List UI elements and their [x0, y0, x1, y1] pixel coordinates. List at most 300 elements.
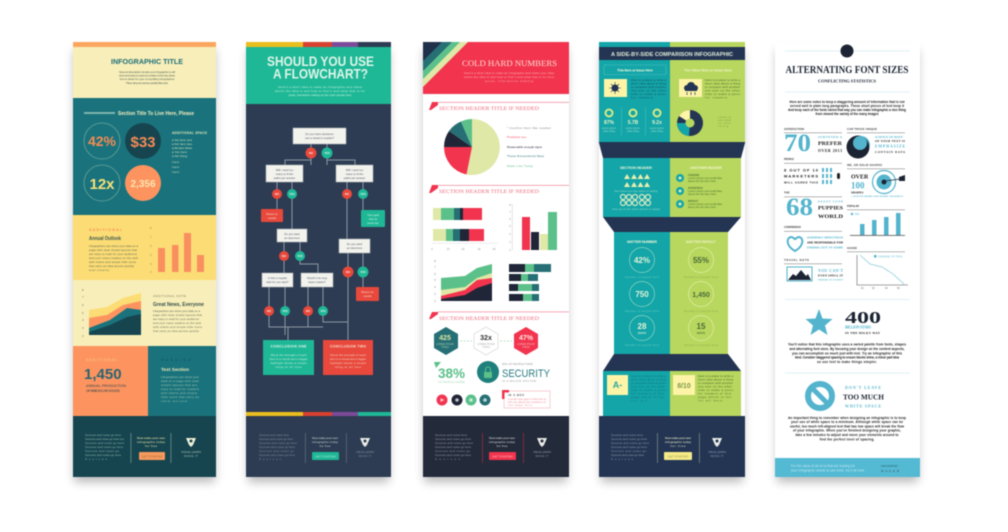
- button: [664, 452, 692, 460]
- column chart: 2: [509, 248, 511, 252]
- stat: 12x: [84, 165, 120, 201]
- additional info list: a list item one: [172, 138, 192, 142]
- footer: your infographic needs to use tools, try it all over.: [791, 468, 865, 472]
- header: [423, 42, 569, 94]
- stat: heart: [784, 225, 844, 251]
- header: COLD HARD NUMBERS: [462, 58, 557, 68]
- body text: You'll notice that this infographic uses a varied palette from fonts, shapes: [788, 342, 906, 346]
- pie legend: * Confirm their like number: [507, 126, 551, 130]
- line chart: gauge: '12: [860, 287, 864, 290]
- three stats: 9.2x: [652, 120, 662, 126]
- footer: Sources and notes here: [611, 433, 643, 437]
- stat: heart: FINDING OUT AT HOME: [807, 246, 843, 250]
- line chart: gauge: GAUGE: [847, 246, 857, 250]
- left grade text: side to make a point: [631, 388, 666, 392]
- text block: annual outlook: Annual Outlook: [89, 236, 121, 242]
- text block: left: Here is a place to write a: [631, 78, 666, 82]
- panel: text section: easy to read by readers: [161, 387, 200, 391]
- additional info list: item: [172, 160, 180, 164]
- title band: A SIDE-BY-SIDE COMPARISON INFOGRAPHIC: [611, 52, 733, 58]
- node labels: NO: [309, 151, 314, 155]
- area chart: 6: [82, 303, 84, 307]
- donut chart: [677, 110, 703, 136]
- footer: MAKER: [881, 469, 900, 473]
- hexagon stat: 47%: 47%: [519, 335, 534, 342]
- panel: text section: data on a page with clear: [161, 379, 199, 383]
- conclusion two: [323, 340, 373, 375]
- node labels: YES: [324, 151, 330, 155]
- three stats: 87%: [604, 120, 615, 126]
- flow box text: [266, 132, 365, 284]
- left captions: Number of people here: [625, 275, 659, 279]
- bar chart: popular: POPULAR: [847, 204, 859, 208]
- subtitle: CONFLICTING STATISTICS: [818, 78, 877, 84]
- column chart: 5: [509, 224, 511, 228]
- stat: 68 puppies: FUZZY CUTE: [818, 200, 843, 204]
- panel: big number: ANNUAL PRODUCTION: [86, 384, 126, 388]
- footer: For the value of all of us that are looking for: [791, 464, 856, 468]
- three stats: Lorem ipsum: [626, 127, 640, 130]
- flow box text: paths per answer: [344, 176, 365, 180]
- left grade text: page which is fun: [631, 395, 664, 399]
- area chart: 8: [82, 288, 84, 292]
- hexagon stat: 32x: [474, 327, 498, 355]
- stat: 8 out of 10: WILL AGREE THIS: [784, 180, 818, 184]
- button: [489, 452, 516, 460]
- donut note: thing: [718, 125, 729, 128]
- list: about the list item here: [688, 179, 717, 183]
- footer: MAKE IT: [358, 454, 372, 458]
- icon: sun: [604, 79, 627, 97]
- section: circle stats: [614, 232, 728, 354]
- dashed link: [460, 340, 512, 342]
- left values: 750: [635, 290, 649, 299]
- node labels: YES: [360, 192, 366, 196]
- callout: too much white space: WHITE SPACE: [845, 404, 881, 408]
- area chart: 8: [434, 259, 436, 263]
- flow box text: paths per answer: [274, 176, 295, 180]
- conclusion one: [263, 340, 314, 375]
- stat: pac chart: [846, 127, 906, 158]
- line chart: gauge: [847, 246, 908, 290]
- right grade text: page which is fun: [698, 395, 731, 399]
- node labels: YES: [289, 192, 295, 196]
- intro text: Here are some notes to keep a staggering amount of information that is not: [790, 100, 905, 104]
- stat: 400: 400: [845, 308, 881, 327]
- header dot and rule: [785, 44, 910, 58]
- column chart: 8: [509, 203, 511, 207]
- stat: 70: SURVEYED A: [818, 135, 843, 139]
- section: two lists: SECTION HEADER: [620, 166, 652, 170]
- text block: right: short idea about a thing: [705, 82, 740, 86]
- bar chart: 7: [150, 235, 152, 239]
- right values: 55%: [693, 256, 709, 265]
- section header 2: [429, 185, 569, 195]
- panel: text section: Text Section: [161, 367, 189, 372]
- footer: VISUAL LEARN: [181, 450, 201, 454]
- panel: text section: with charts and simple: [161, 391, 197, 395]
- text block: right: one over on the other: [705, 88, 740, 92]
- stat: over 100 shapes: [847, 163, 905, 198]
- additional info list: item: [172, 165, 180, 169]
- title band: [599, 47, 745, 60]
- right values: [692, 256, 710, 335]
- list: about the list item here: [688, 192, 717, 196]
- footer: Sources and notes go: [435, 449, 470, 453]
- footer: for free: [496, 444, 508, 448]
- footer: for free: [320, 444, 331, 448]
- stat: 8 out of 10: 8 OUT OF 10: [784, 168, 819, 172]
- text block: great news: with charts and simple little icons: [153, 325, 202, 329]
- line chart: gauge: '13: [871, 287, 875, 290]
- text block: great news: Great News, Everyone: [153, 302, 204, 308]
- text block: great news: are easy to read for your audience: [153, 317, 199, 321]
- left values: [634, 256, 650, 335]
- area chart: [434, 259, 492, 303]
- stat: 70: OVER 2013: [818, 149, 842, 153]
- node labels: NO: [345, 192, 350, 196]
- section header 1: SECTION HEADER TITLE IF NEEDED: [439, 107, 539, 112]
- header: which the idea is and how to find it and what that is for here: [464, 75, 554, 79]
- section title: [84, 111, 194, 117]
- section: two lists: One out of the other person in space: [612, 207, 661, 211]
- area chart: 3: [434, 292, 436, 296]
- footer: for free: [670, 444, 686, 448]
- stat: mountain: [784, 258, 844, 282]
- stat: mountain: YOU CAN'T: [818, 268, 843, 273]
- right grade text: for readers of this: [698, 392, 732, 396]
- text block: left: side to make a point: [631, 92, 666, 96]
- outcome boxes: Return to: [266, 212, 278, 216]
- text block: annual outlook: Infographics can show your data on a: [89, 244, 138, 248]
- footer: MAKE IT: [710, 454, 724, 458]
- additional info list: item: [172, 170, 180, 174]
- text block: annual outlook: ADDITIONAL: [89, 228, 123, 232]
- icon row: rings: [620, 194, 650, 206]
- right circles: [688, 248, 714, 340]
- pie legend: Those Encountered Days: [507, 154, 544, 158]
- footer: MAKE IT: [536, 454, 549, 458]
- left grade text: short idea about a thing: [631, 378, 666, 382]
- icon row: people: [624, 174, 650, 187]
- grade 8/10: 8/10: [677, 383, 691, 390]
- additional info list: a list item two: [172, 142, 192, 146]
- body text: so use text to make things simpler.: [817, 360, 877, 364]
- no nodes: [264, 148, 354, 316]
- additional info list: a list thing: [172, 154, 187, 158]
- stat: 38%: 38%: [438, 365, 466, 381]
- donut note: [718, 116, 732, 128]
- area chart: 7: [434, 265, 436, 269]
- list: STATISTICS: [688, 186, 703, 190]
- outcome boxes: some fun: [367, 221, 379, 225]
- area chart: 2: [434, 299, 436, 303]
- list: about the list item here: [688, 205, 717, 209]
- conclusion one: CONCLUSION ONE: [270, 344, 307, 348]
- footer: Sources and notes go here: [85, 445, 123, 449]
- footer: Sources and notes go here: [259, 453, 295, 457]
- hexagon stat: 32x: 32x: [480, 335, 492, 342]
- right grade text: [698, 374, 733, 402]
- stat: 2,356: [125, 165, 161, 201]
- stacked bars: 0: [431, 247, 433, 251]
- stat: pac chart: EMPHASIZE: [875, 144, 905, 148]
- button: GET STARTED: [668, 454, 689, 458]
- right captions: Number of people here: [684, 309, 718, 313]
- stat: 68 puppies: [784, 190, 843, 221]
- panel: cold hard numbers: [423, 42, 569, 477]
- footer: Sources and notes here: [435, 433, 467, 437]
- footer: Sources and notes go here: [85, 441, 124, 445]
- node labels: YES: [297, 254, 303, 258]
- flow box text: Is this a regular: [268, 276, 287, 280]
- hexagon stat: 47%: LOREM IPSUM: [517, 343, 535, 346]
- three stats: dolor thing: [627, 130, 639, 133]
- intro text: served well in plain long paragraphs. These short pieces of text keep it: [790, 104, 905, 108]
- callout: too much white space: [843, 385, 885, 408]
- outcome boxes: Your goal: [367, 213, 379, 217]
- additional info list: a list item: [172, 150, 188, 154]
- right values: DAYS: [697, 331, 705, 335]
- callout: too much white space: DON'T LEAVE: [845, 385, 881, 390]
- text block: left: for readers: [631, 96, 654, 100]
- right heading: The Other Item or Issue Here: [684, 68, 732, 72]
- flow box text: steps maybe?: [308, 280, 326, 284]
- navy fold 3: [603, 354, 741, 371]
- stacked bars: [431, 208, 498, 251]
- flow box text: many to fit the: [346, 172, 364, 176]
- security stat: IS A MAJOR FACTOR: [502, 379, 536, 383]
- security stat: SECURITY: [502, 368, 551, 380]
- pie legend: Made Like Today: [507, 164, 534, 168]
- footer: infographic today: [137, 440, 165, 444]
- body text: of your infographic. When you've finished designing your graphic,: [793, 428, 901, 432]
- stat: heart: SUDDENLY INFECTIOUS: [807, 236, 843, 240]
- text block: left: one over on the other: [631, 88, 666, 92]
- line chart: gauge: CHANGE TO THIS: [878, 256, 902, 258]
- text block: left: [631, 78, 666, 100]
- panel shadows: [74, 50, 918, 482]
- additional info list: ADDITIONAL SPACE: [172, 131, 207, 135]
- stat: 38%: OF PEOPLE AGREE: [438, 380, 465, 384]
- panel: text section: HEADING: [161, 358, 191, 362]
- bar chart: popular: [847, 204, 905, 236]
- stat: 8 out of 10: [784, 157, 842, 184]
- right grade text: one over on the other: [698, 384, 732, 388]
- column chart: 7: [509, 210, 511, 214]
- left captions: Number of people here: [625, 343, 659, 347]
- stat: pac chart: SCIENCE OF MANY: [875, 135, 904, 139]
- bar chart: 6: [150, 244, 152, 248]
- left captions: [625, 275, 659, 347]
- footer: infographic today: [665, 440, 691, 444]
- conclusion one: item is a visual and a bigger: [270, 357, 308, 361]
- outcome boxes: [261, 209, 385, 301]
- area chart: 4: [434, 285, 436, 289]
- panel: text section: [148, 346, 216, 416]
- footer: Sources: [259, 457, 282, 461]
- line chart: gauge: '15: [896, 287, 900, 290]
- flow box text: Will i need too: [346, 168, 364, 172]
- footer: Sources: [611, 457, 634, 461]
- text block: annual outlook: and your many readers on the web: [89, 256, 138, 260]
- text block: left: short idea about a thing: [631, 82, 666, 86]
- footer: infographic today: [312, 440, 338, 444]
- panel: big number: ADDITIONAL: [86, 358, 117, 362]
- hexagon stat: 425: THING: [441, 346, 449, 349]
- navy fold 1: [599, 142, 745, 158]
- body text: your use of white space to a minimum. Although white space can be: [791, 420, 903, 424]
- footer: Sources and notes go here: [85, 453, 121, 457]
- body text: [788, 416, 906, 442]
- node labels: YES: [320, 309, 326, 313]
- footer: Sources and notes go here: [435, 453, 471, 457]
- node labels: NO: [275, 192, 280, 196]
- area chart: [82, 288, 141, 338]
- text block: right: for readers: [705, 96, 728, 100]
- node labels: NO: [306, 309, 311, 313]
- flow box text: an idea here: [284, 236, 300, 240]
- text block: right: to compare with another: [705, 85, 740, 89]
- footer: Sources: [85, 457, 108, 461]
- flow box text: Do you want: [284, 232, 300, 236]
- bar chart: [150, 226, 204, 274]
- section header 3: SECTION HEADER TITLE IF NEEDED: [439, 317, 539, 322]
- corner stripes: [423, 42, 468, 87]
- footer: Sources and notes go: [85, 449, 119, 453]
- header: quick, interactive making: [485, 79, 533, 83]
- footer: MAKE IT: [184, 454, 198, 458]
- section header 2: SECTION HEADER TITLE IF NEEDED: [439, 190, 539, 195]
- donut note: Lorem ip: [718, 116, 732, 119]
- three stats: Lorem ipsum: [650, 127, 664, 130]
- stat: 68 puppies: 68: [786, 194, 813, 221]
- node labels: NO: [346, 270, 351, 274]
- section: two lists: ANOTHER HEADER: [690, 166, 722, 170]
- footer: Sources and notes go here: [611, 437, 647, 441]
- button: [139, 452, 165, 460]
- conclusion two: CONCLUSION TWO: [330, 344, 366, 348]
- text block: great news: ADDITIONAL NOTE: [153, 294, 186, 298]
- footer: Sources and notes go here: [435, 437, 471, 441]
- left grade text: Here is a place to write a: [631, 374, 666, 378]
- heading: infographic title: INFOGRAPHIC TITLE: [111, 59, 183, 66]
- pie legend: Products too: [507, 135, 526, 139]
- callout: too much white space: TOO MUCH: [843, 394, 885, 402]
- right grade text: to compare with another: [698, 381, 733, 385]
- footer: INFOGRAPHIC: [881, 464, 899, 468]
- stat: 400: BILLION STARS: [845, 326, 871, 330]
- text block: great news: and your many readers on the web: [153, 321, 201, 325]
- right captions: [684, 275, 718, 347]
- stat: over 100 shapes: WE, OR SOLID SHAPES: [847, 163, 882, 167]
- intro text: from viewed the variety of the many images: [816, 112, 879, 116]
- horizontal stacked bars: [509, 264, 551, 301]
- footer: VISUAL LEARN: [356, 450, 374, 454]
- left heading: This Item or Issue Here: [617, 68, 653, 72]
- stat: 70: 70: [784, 130, 811, 157]
- stat: over 100 shapes: SHAPES: [851, 190, 864, 194]
- footer: Now make your own: [489, 436, 515, 440]
- panel: big number: 1,450: [84, 366, 122, 383]
- panel: big number: OF BRICKS OR GOODS: [86, 389, 121, 393]
- panel: side by side comparison: [599, 42, 745, 477]
- right grade text: side to make a point: [698, 388, 733, 392]
- list: [676, 173, 723, 209]
- footer: [775, 458, 920, 477]
- intro text: And keep each of the fonts varied that way you can make infographic a nice thing: [788, 108, 906, 112]
- section header 3: [429, 312, 569, 322]
- icon: logo: [360, 438, 370, 447]
- bar chart: popular: 5%: [855, 212, 860, 216]
- callout: a small note goes in this box to: [508, 398, 547, 401]
- stat: 70: [784, 127, 843, 157]
- list: Lorem ipsum one small idea: [688, 176, 723, 180]
- panel: big number: [73, 346, 148, 416]
- conclusion one: About the strength of each: [270, 353, 307, 357]
- pie legend: Reasonable enough signs: [507, 145, 542, 149]
- left values: DAYS: [638, 331, 646, 335]
- donut note: sum dolor: [718, 119, 731, 122]
- icon: star: [806, 309, 832, 335]
- panel: text section: idea across: [161, 399, 188, 403]
- outcome boxes: Ask for: [369, 217, 377, 221]
- color band: [246, 412, 391, 416]
- pie legend: [507, 126, 551, 168]
- security stat: 90% OF PEOPLE THINK: [502, 362, 533, 366]
- footer: Sources and notes go here: [611, 441, 649, 445]
- text block: annual outlook: are easy to read for your audience: [89, 252, 137, 256]
- text block: annual outlook: and clearly: [89, 268, 110, 272]
- bar chart: 5: [150, 253, 152, 257]
- column chart: 6: [509, 217, 511, 221]
- icon: logo: [537, 438, 547, 447]
- icon row: [436, 394, 490, 406]
- panel: flowchart: [246, 42, 391, 477]
- icon: logo: [186, 438, 196, 447]
- footer: Sources and notes go here: [435, 445, 471, 449]
- footer: [73, 416, 216, 477]
- text block: great news: Infographics can show your data on a: [153, 309, 200, 313]
- yes nodes: [280, 148, 368, 316]
- text block: great news: page with clear simple layouts that: [153, 313, 202, 317]
- header: which the idea is and how to find it and what that is for: [275, 89, 365, 93]
- right grade text: short idea about a thing: [698, 378, 733, 382]
- bar chart: 8: [150, 226, 152, 230]
- flow box text: Will i need too: [276, 168, 294, 172]
- stripe: [246, 42, 358, 47]
- outcome boxes: results: [268, 216, 277, 220]
- text block: intro: [119, 70, 176, 85]
- stat: pac chart: CONTAIN DATA: [875, 150, 906, 154]
- flow box text: Do you want: [347, 242, 362, 246]
- stat: 12x: 12x: [89, 176, 115, 193]
- area chart: 6: [434, 272, 436, 276]
- list: RESULT: [688, 199, 699, 203]
- footer: Now make your own: [312, 436, 338, 440]
- outcome boxes: Return for: [361, 290, 374, 294]
- button: GET STARTED: [315, 454, 337, 458]
- stacked bars: 40: [492, 247, 496, 251]
- right captions: Number of people here: [684, 343, 718, 347]
- stat: 38%: [434, 362, 466, 384]
- flow box text: many to fit the: [276, 172, 294, 176]
- right grade text: Here is a place to write a: [698, 374, 733, 378]
- left heading: [604, 65, 666, 74]
- section: circle stats: MATTER NUMBER: [627, 240, 657, 244]
- footer: Sources and notes go: [611, 449, 646, 453]
- icon: lock: [477, 361, 499, 383]
